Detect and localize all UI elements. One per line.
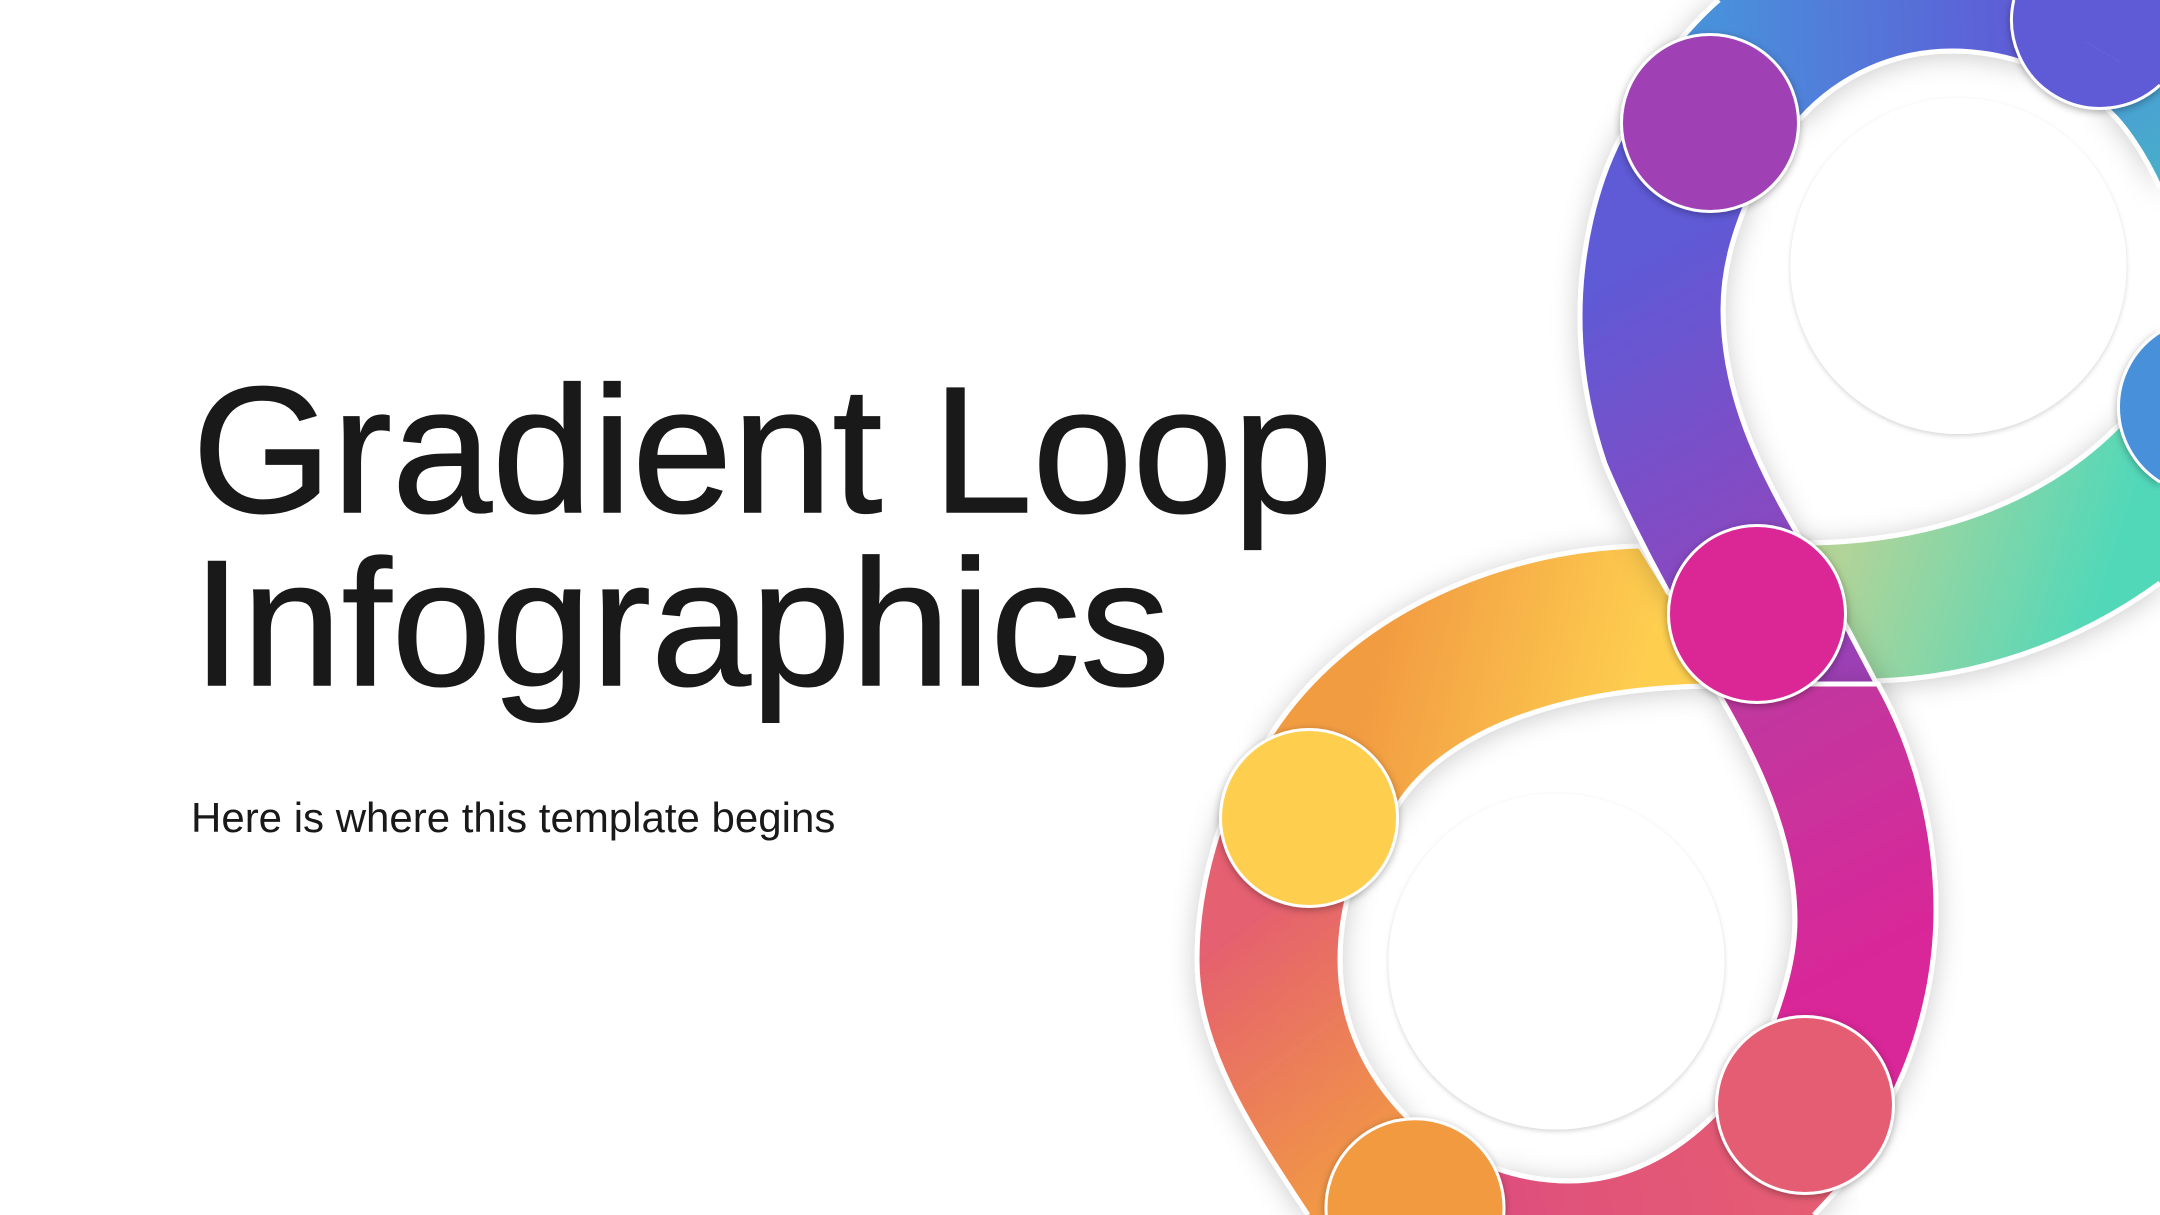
bottom inner white circle xyxy=(1388,794,1724,1130)
node: yellow xyxy=(1220,730,1398,906)
band: top arc blue to violet xyxy=(1660,0,2100,123)
node: violet top right xyxy=(2012,0,2160,108)
node: magenta center xyxy=(1668,526,1846,702)
node: orange bottom xyxy=(1326,1119,1504,1215)
band: coral to orange left segment xyxy=(1197,800,1430,1215)
title second line: Infographics xyxy=(192,524,1170,724)
subtitle: Here is where this template begins xyxy=(191,794,835,841)
figure-eight gradient loop xyxy=(1197,0,2160,1215)
band: top right teal blue xyxy=(2100,60,2160,188)
band: green segment xyxy=(1780,400,2160,684)
band: violet to purple diagonal segment xyxy=(1580,110,1880,690)
band: bottom pink segment xyxy=(1470,1113,1839,1215)
title: Gradient Loop xyxy=(192,350,1333,551)
node: purple xyxy=(1622,34,1798,212)
node: blue right xyxy=(2118,332,2160,482)
band: orange to yellow segment xyxy=(1262,546,1720,815)
top inner white circle xyxy=(1790,98,2126,434)
node: coral xyxy=(1716,1016,1894,1194)
band: magenta right segment xyxy=(1712,684,1936,1150)
